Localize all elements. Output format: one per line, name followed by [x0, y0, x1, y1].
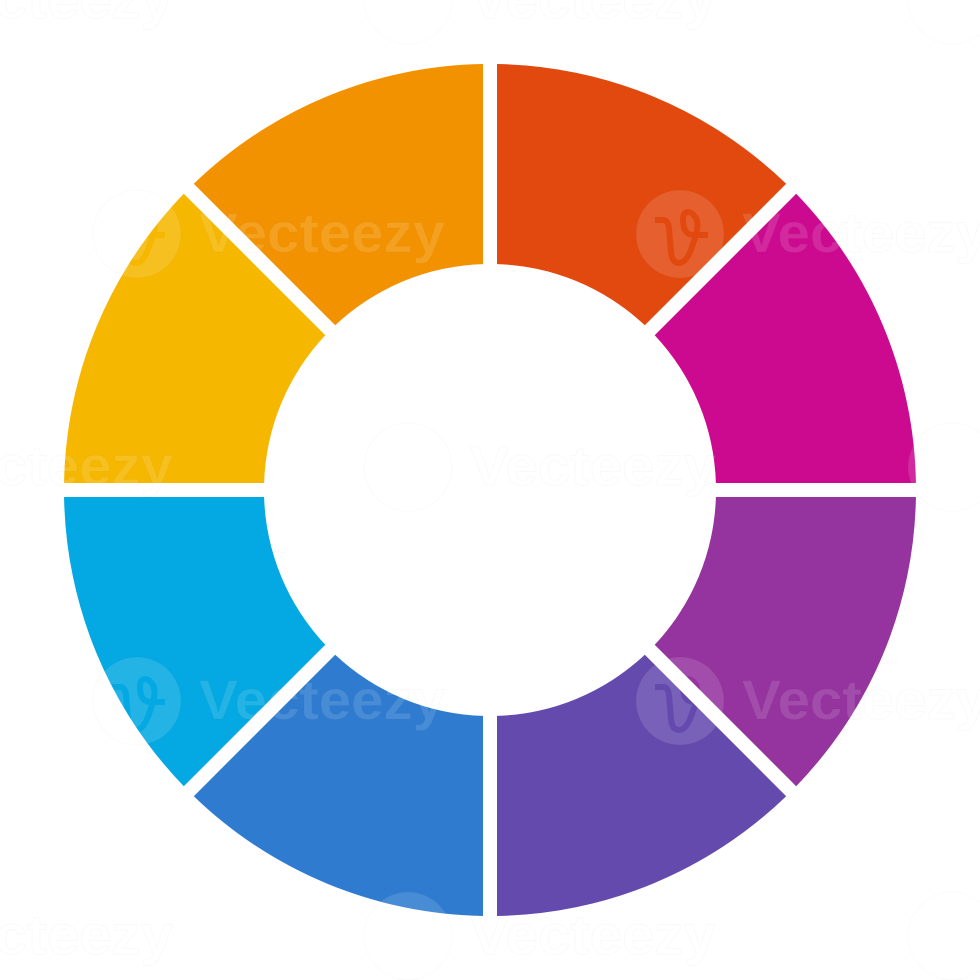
segment: orange	[194, 64, 483, 325]
watermark: lower right: Vecteezy	[742, 668, 980, 731]
infographic: eight segment donut	[64, 64, 916, 916]
watermark: upper right	[636, 190, 839, 278]
segment: magenta	[655, 194, 916, 483]
watermark: lower left	[93, 657, 445, 745]
watermark tiles	[64, 190, 916, 914]
segment: violet	[497, 655, 786, 916]
watermark: lower right	[636, 657, 861, 745]
watermark: upper left: Vecteezy	[199, 201, 445, 264]
watermark: middle right	[908, 446, 916, 483]
watermark: bottom centre	[380, 892, 446, 914]
segment: purple	[655, 497, 916, 786]
watermark: middle centre: Vecteezy	[470, 434, 716, 497]
segment: blue	[194, 655, 483, 916]
watermark: top right	[908, 0, 980, 44]
watermark: top centre	[364, 0, 716, 44]
donut ring	[64, 64, 916, 916]
watermark: bottom right	[908, 892, 980, 980]
watermark: bottom centre: Vecteezy	[470, 903, 716, 966]
segment: cyan	[64, 497, 325, 786]
watermark: upper right: Vecteezy	[742, 201, 980, 264]
watermark: middle centre	[714, 456, 716, 460]
watermark: upper left	[122, 207, 444, 278]
segment: yellow	[64, 194, 325, 483]
segment: red-orange	[497, 64, 786, 325]
watermark: lower left: Vecteezy	[199, 668, 445, 731]
